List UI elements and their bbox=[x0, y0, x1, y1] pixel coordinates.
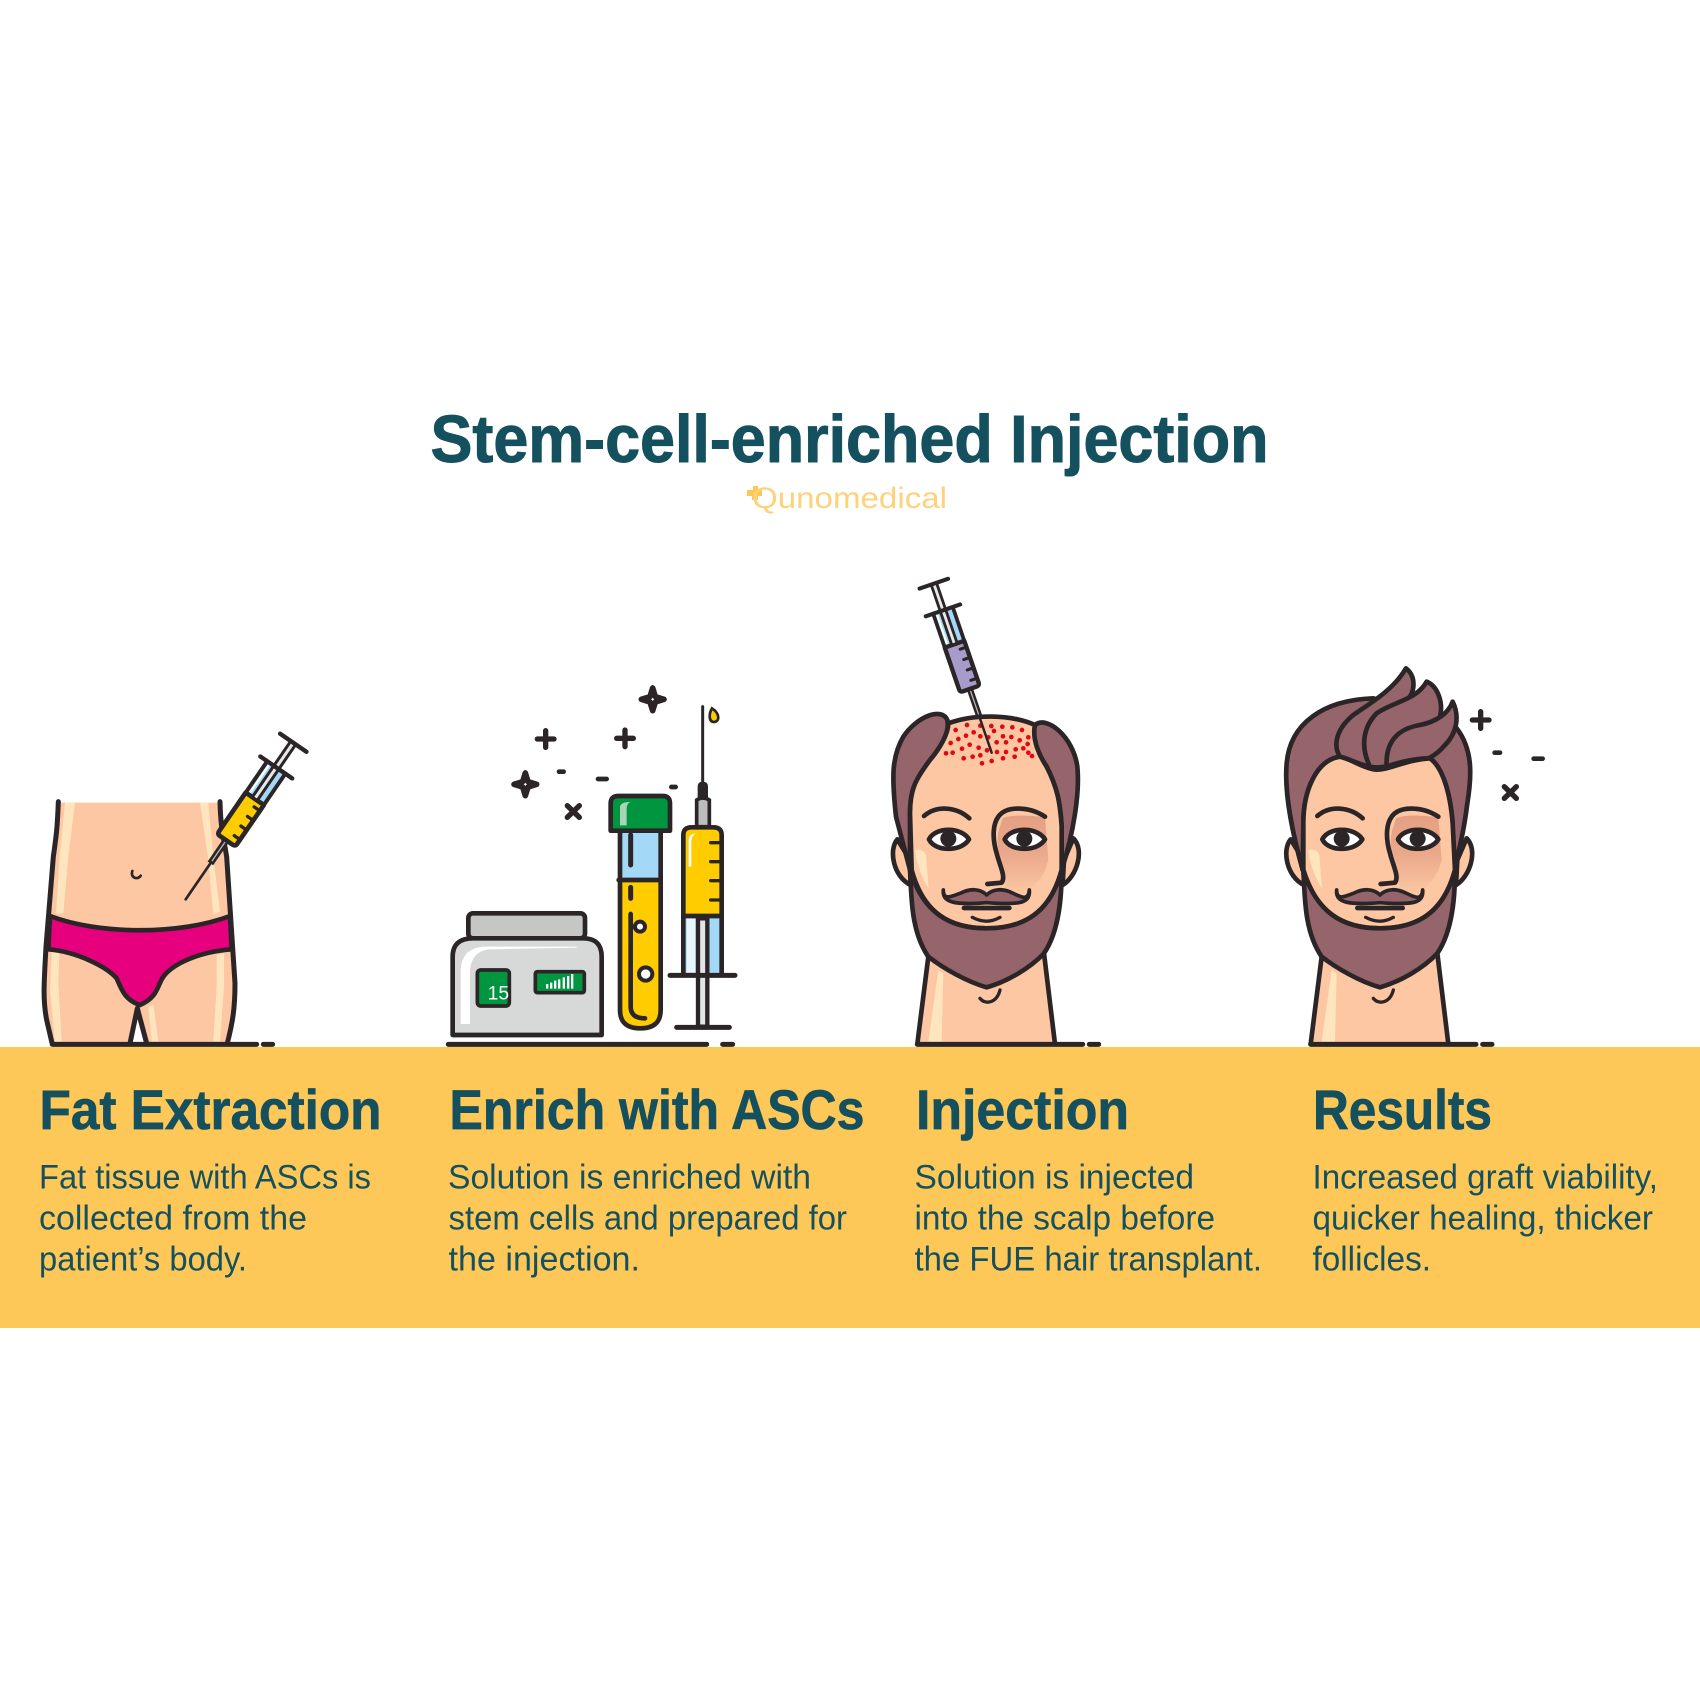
illustration: torso with syringe bbox=[44, 732, 309, 1044]
text block: injection description: into the scalp before bbox=[914, 1200, 1215, 1238]
text block: enrichment description: the injection. bbox=[448, 1240, 640, 1278]
yellow caption band bbox=[0, 1047, 1700, 1328]
icon: test tube bbox=[611, 796, 670, 1028]
text block: fat extraction description: Fat tissue with ASCs is bbox=[39, 1158, 371, 1196]
text block: results description: quicker healing, thicker bbox=[1312, 1200, 1653, 1238]
icon: centrifuge machine bbox=[453, 913, 602, 1035]
panel: injection bbox=[893, 578, 1262, 1278]
text block: enrichment description: Solution is enriched with bbox=[448, 1158, 811, 1196]
logo: Qunomedical: Qunomedical bbox=[752, 482, 947, 515]
panel: fat extraction bbox=[39, 732, 382, 1278]
text block: fat extraction description: patient’s body. bbox=[39, 1240, 247, 1278]
illustration: centrifuge, tube and syringe bbox=[448, 688, 735, 1044]
illustration: man with full hair bbox=[1286, 668, 1543, 1044]
icon: sparkles bbox=[514, 688, 676, 817]
heading: Fat Extraction: Fat Extraction bbox=[40, 1078, 382, 1141]
quiff locks bbox=[1336, 668, 1457, 767]
heading: Enrich with ASCs: Enrich with ASCs bbox=[450, 1078, 864, 1141]
text block: injection description bbox=[914, 1158, 1262, 1278]
text block: fat extraction description bbox=[39, 1158, 371, 1278]
text block: results description: Increased graft viability, bbox=[1312, 1158, 1658, 1196]
icon: vertical syringe bbox=[670, 707, 735, 1027]
text block: results description bbox=[1312, 1158, 1658, 1278]
title: Stem-cell-enriched Injection bbox=[430, 402, 1268, 477]
icon: syringe bbox=[170, 732, 309, 910]
heading: Injection: Injection bbox=[916, 1078, 1129, 1141]
icon: centrifuge machine: 15 bbox=[488, 983, 509, 1004]
text block: injection description: Solution is injected bbox=[914, 1158, 1194, 1196]
panel: enrich with ASCs bbox=[448, 688, 864, 1278]
text block: enrichment description bbox=[448, 1158, 847, 1278]
text block: results description: follicles. bbox=[1312, 1240, 1431, 1278]
heading: Results: Results bbox=[1313, 1078, 1492, 1141]
illustration: balding head with syringe bbox=[893, 578, 1099, 1044]
icon: sparkles bbox=[1472, 712, 1543, 798]
scalp injection dots bbox=[944, 723, 1034, 766]
icon: purple syringe bbox=[917, 578, 1009, 759]
panel: results bbox=[1286, 668, 1658, 1278]
text block: injection description: the FUE hair transplant. bbox=[914, 1240, 1262, 1278]
text block: enrichment description: stem cells and prepared for bbox=[448, 1200, 847, 1238]
text block: fat extraction description: collected from the bbox=[39, 1200, 307, 1238]
